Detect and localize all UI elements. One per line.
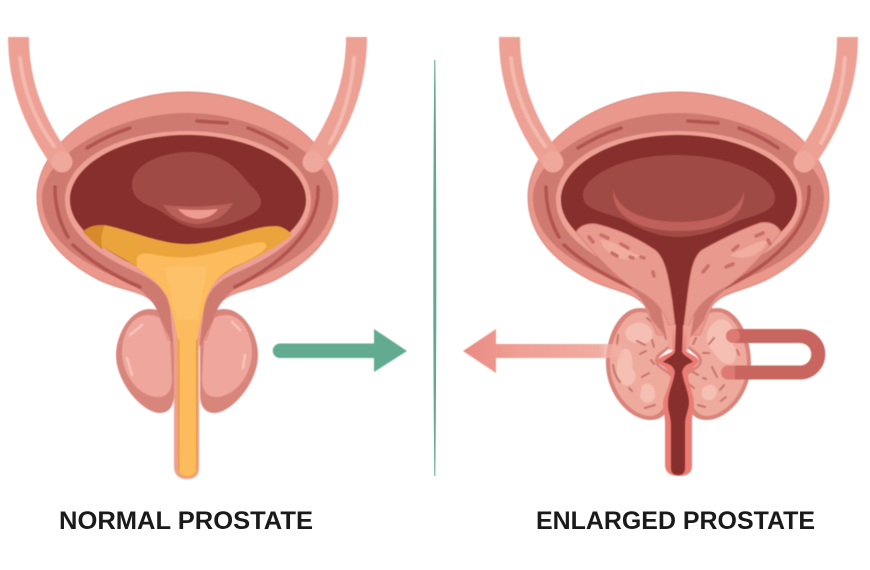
median lobe right <box>684 222 781 325</box>
bladder lumen <box>70 135 306 305</box>
median lobe left <box>576 224 675 325</box>
enlarged prostate right lobe <box>682 308 751 420</box>
bladder muscle layer <box>533 113 824 338</box>
bladder outer wall <box>528 92 829 335</box>
bladder muscle layer <box>42 113 333 345</box>
urethra lining <box>657 325 699 476</box>
label: enlarged prostate: ENLARGED PROSTATE <box>536 507 815 535</box>
divider <box>434 60 436 476</box>
bladder inner fold <box>583 155 775 237</box>
figure: enlarged prostate <box>510 37 848 476</box>
prostate lobes <box>116 309 258 413</box>
urine <box>83 225 292 477</box>
constricted urethra channel <box>663 285 693 475</box>
left ureter <box>18 37 72 172</box>
bladder outer wall <box>37 92 338 340</box>
right ureter <box>794 37 848 172</box>
bladder lumen <box>561 135 797 335</box>
bladder lining and urethra <box>65 131 311 479</box>
wall fibres <box>546 121 809 287</box>
wall fibres <box>55 121 318 287</box>
pink arrow <box>463 329 623 373</box>
label: normal prostate: NORMAL PROSTATE <box>59 507 313 535</box>
green arrow <box>273 329 407 372</box>
right ureter <box>302 37 356 172</box>
enlarged prostate left lobe <box>606 308 675 420</box>
figure: normal prostate <box>18 37 356 479</box>
left ureter <box>510 37 564 172</box>
bladder lining <box>556 131 802 350</box>
U-shaped tube <box>721 329 818 380</box>
bladder inner fold <box>132 152 261 228</box>
